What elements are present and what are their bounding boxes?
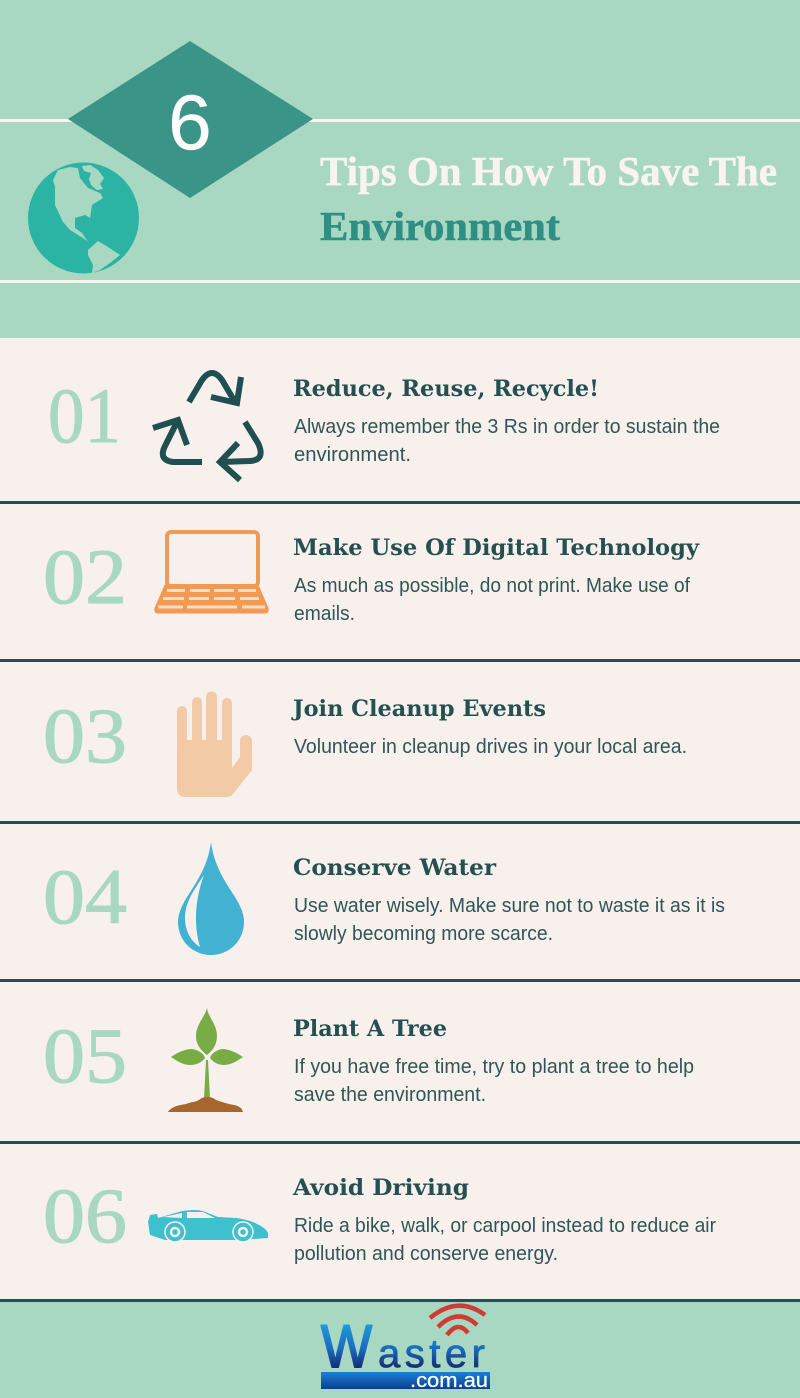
body text [294, 575, 690, 625]
number 03: 03 [43, 692, 127, 779]
icon: laptop [155, 532, 268, 613]
panel: tips background [0, 338, 800, 1302]
body text: emails. [294, 603, 355, 625]
panel: tip 06 [43, 1172, 716, 1265]
body text: save the environment. [294, 1084, 486, 1106]
body text: If you have free time, try to plant a tree to help [294, 1056, 694, 1078]
body text: Use water wisely. Make sure not to waste it as it is [294, 895, 725, 917]
title: Environment [320, 203, 560, 249]
number 04: 04 [43, 853, 127, 940]
number 01: 01 [48, 372, 121, 459]
body text: Volunteer in cleanup drives in your local area. [294, 736, 687, 758]
panel: tip 04 [43, 842, 725, 955]
panel: tip 05 [43, 1008, 694, 1112]
icon: globe [28, 162, 139, 274]
heading: Join Cleanup Events [291, 696, 546, 722]
number 05: 05 [43, 1012, 127, 1099]
icon: recycle arrows [153, 373, 261, 480]
panel: footer [0, 1302, 800, 1398]
icon: wifi arcs [430, 1306, 485, 1335]
title: Tips On How To Save The [320, 148, 777, 194]
panel: header [0, 0, 800, 338]
body text: As much as possible, do not print. Make use of [294, 575, 690, 597]
body text [294, 895, 725, 945]
heading: Avoid Driving [292, 1175, 469, 1201]
icon: water drop [178, 842, 244, 955]
icon: diamond with number 6 [68, 41, 313, 198]
heading: Make Use Of Digital Technology [293, 535, 700, 561]
number 06: 06 [43, 1172, 127, 1259]
icon: hand [177, 692, 252, 797]
body text: Always remember the 3 Rs in order to sustain the [294, 416, 720, 438]
number 02: 02 [43, 533, 127, 620]
heading: Plant A Tree [293, 1016, 447, 1042]
body text [294, 416, 720, 466]
icon: diamond with number 6: 6 [168, 78, 212, 166]
title [320, 148, 777, 249]
body text: pollution and conserve energy. [294, 1243, 558, 1265]
panel: tip 01 [48, 372, 720, 480]
heading: Conserve Water [293, 855, 496, 881]
icon: plant [168, 1008, 243, 1112]
body text: environment. [294, 444, 411, 466]
body text: slowly becoming more scarce. [294, 923, 553, 945]
logo: Waster.com.au: .com.au [410, 1370, 488, 1392]
body text: Ride a bike, walk, or carpool instead to reduce air [294, 1215, 716, 1237]
logo: Waster.com.au: W [321, 1313, 372, 1380]
body text [294, 1056, 694, 1106]
panel: tip 02 [43, 532, 700, 625]
logo: Waster.com.au: aster [378, 1332, 485, 1376]
icon: car [148, 1210, 268, 1242]
panel: tip 03 [43, 692, 687, 797]
logo: Waster.com.au [321, 1306, 490, 1392]
body text [294, 1215, 716, 1265]
heading: Reduce, Reuse, Recycle! [293, 376, 599, 402]
